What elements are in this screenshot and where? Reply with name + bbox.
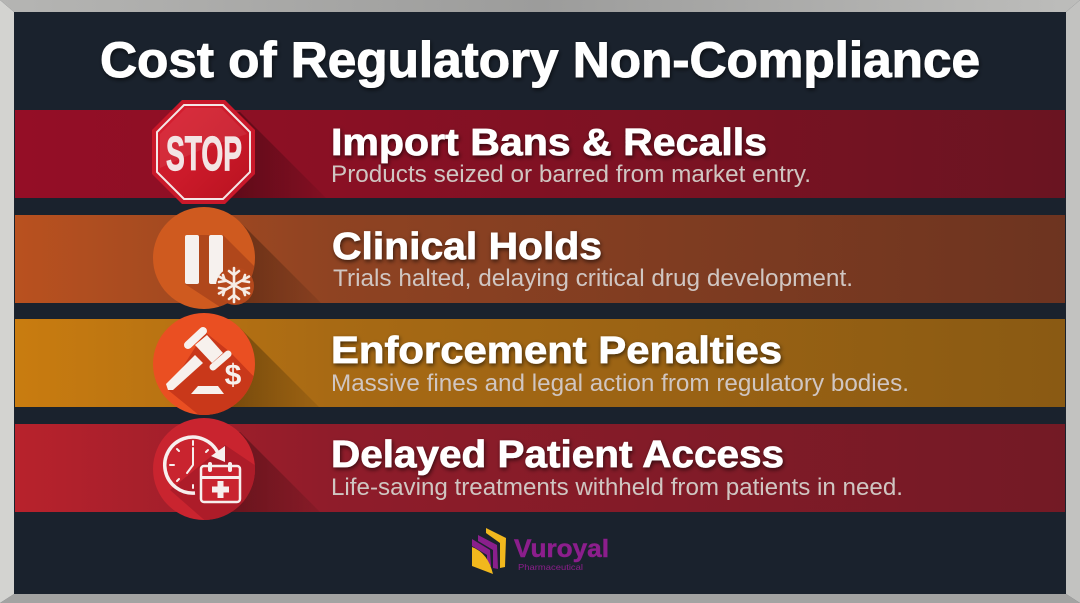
logo: Vuroyal Pharmaceutical (472, 528, 609, 574)
heading 1: Import Bans & Recalls (331, 122, 767, 164)
brand subtitle: Pharmaceutical (518, 562, 583, 572)
heading 2: Clinical Holds (332, 226, 602, 268)
icon: stop sign: STOP (166, 128, 242, 181)
icon: clock and calendar (153, 418, 255, 520)
icon shadow 2 (240, 222, 320, 303)
band 2 (15, 215, 1065, 303)
icon: gavel with dollar (153, 313, 255, 415)
panel: clinical holds (15, 207, 1065, 309)
icon shadow 4 (232, 432, 320, 512)
icon shadow 3 (232, 328, 318, 407)
description 4: Life-saving treatments withheld from patients in need. (331, 474, 903, 501)
heading 3: Enforcement Penalties (331, 330, 782, 372)
title: Cost of Regulatory Non-Compliance (100, 32, 980, 88)
heading 4: Delayed Patient Access (331, 434, 784, 476)
logo mark (472, 528, 506, 574)
icon: pause and snowflake (153, 207, 255, 309)
description 1: Products seized or barred from market entry. (331, 161, 811, 188)
band 1 (15, 110, 1065, 198)
panel: enforcement penalties (15, 313, 1065, 415)
description 3: Massive fines and legal action from regulatory bodies. (331, 370, 909, 397)
panel: import bans and recalls (15, 100, 1065, 204)
band 4 (15, 424, 1065, 512)
icon: gavel with dollar: $ (225, 359, 242, 392)
panel: delayed patient access (15, 418, 1065, 520)
icon shadow 1 (231, 112, 324, 198)
description 2: Trials halted, delaying critical drug development. (333, 265, 853, 292)
brand name: Vuroyal (514, 535, 609, 563)
icon: stop sign (152, 100, 255, 204)
band 3 (15, 319, 1065, 407)
